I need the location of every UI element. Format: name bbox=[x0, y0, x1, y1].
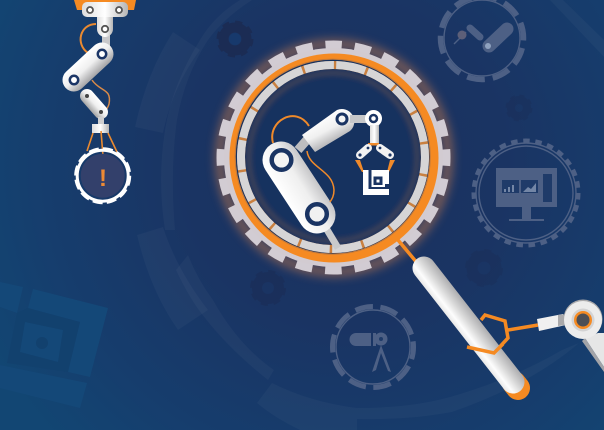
main arm bbox=[74, 54, 102, 80]
upper arm bbox=[302, 109, 354, 152]
thin arc band bbox=[161, 0, 252, 230]
second cable bbox=[307, 151, 334, 202]
robot arm inside lens bbox=[272, 109, 395, 248]
mount bar bbox=[82, 2, 128, 17]
orange bracket back bbox=[481, 315, 508, 352]
handle end cap bbox=[514, 383, 518, 388]
top joint bbox=[97, 17, 113, 37]
wrist link bbox=[350, 115, 368, 123]
warning gear bbox=[76, 149, 130, 203]
cable loop bbox=[272, 116, 309, 143]
large arm segment bbox=[281, 160, 317, 215]
magnifier lens gear bbox=[222, 46, 446, 270]
joint bbox=[272, 150, 291, 170]
orange ring bbox=[230, 54, 438, 262]
ring ticks bbox=[241, 65, 425, 249]
cable bbox=[92, 80, 109, 112]
handle body bbox=[424, 268, 513, 382]
tooth lower left bbox=[137, 227, 208, 330]
lower stem bbox=[326, 228, 338, 248]
small arm bbox=[87, 96, 101, 112]
inner segmented ring bbox=[238, 62, 428, 252]
magnifier stem bbox=[398, 240, 418, 264]
top right arc bbox=[550, 0, 604, 57]
neck stem bbox=[102, 34, 110, 46]
claw arms bbox=[360, 148, 390, 155]
lens interior bbox=[235, 59, 430, 254]
icon: monitor gear bbox=[474, 141, 578, 245]
cube bbox=[363, 169, 389, 195]
faint large gear shapes bbox=[135, 0, 604, 430]
gripper neck bbox=[370, 125, 379, 143]
icon: top right gear with robot arm bbox=[432, 0, 532, 88]
gripper block bbox=[92, 124, 109, 133]
icon: bottom gear with camera arm bbox=[327, 301, 419, 393]
elbow link bbox=[298, 134, 312, 150]
gear teeth bbox=[222, 46, 446, 270]
bottom right band bbox=[357, 343, 579, 419]
joint bbox=[564, 300, 602, 338]
magnifier handle with arm bbox=[424, 268, 604, 388]
glow behind lens bbox=[220, 44, 448, 272]
wrist joint bbox=[365, 110, 382, 127]
tooth bottom bbox=[257, 383, 357, 430]
cable loop bbox=[81, 24, 96, 53]
orange bracket front bbox=[467, 344, 503, 353]
stem bbox=[98, 117, 104, 125]
mount block bbox=[74, 0, 136, 10]
arm link bbox=[537, 314, 566, 331]
icon: dark small gears bbox=[218, 22, 531, 304]
lower arc band bbox=[176, 255, 274, 380]
robot arm top left bbox=[70, 0, 136, 203]
lower arm bbox=[585, 333, 604, 367]
claw fingers bbox=[355, 160, 395, 172]
gear body bbox=[224, 48, 443, 267]
inner orange glow bbox=[249, 73, 417, 241]
connector bbox=[508, 325, 538, 330]
warning mark: ! bbox=[99, 165, 107, 192]
orange wires bbox=[87, 131, 117, 156]
faint square logo bbox=[0, 282, 108, 408]
tooth upper left bbox=[135, 32, 200, 133]
